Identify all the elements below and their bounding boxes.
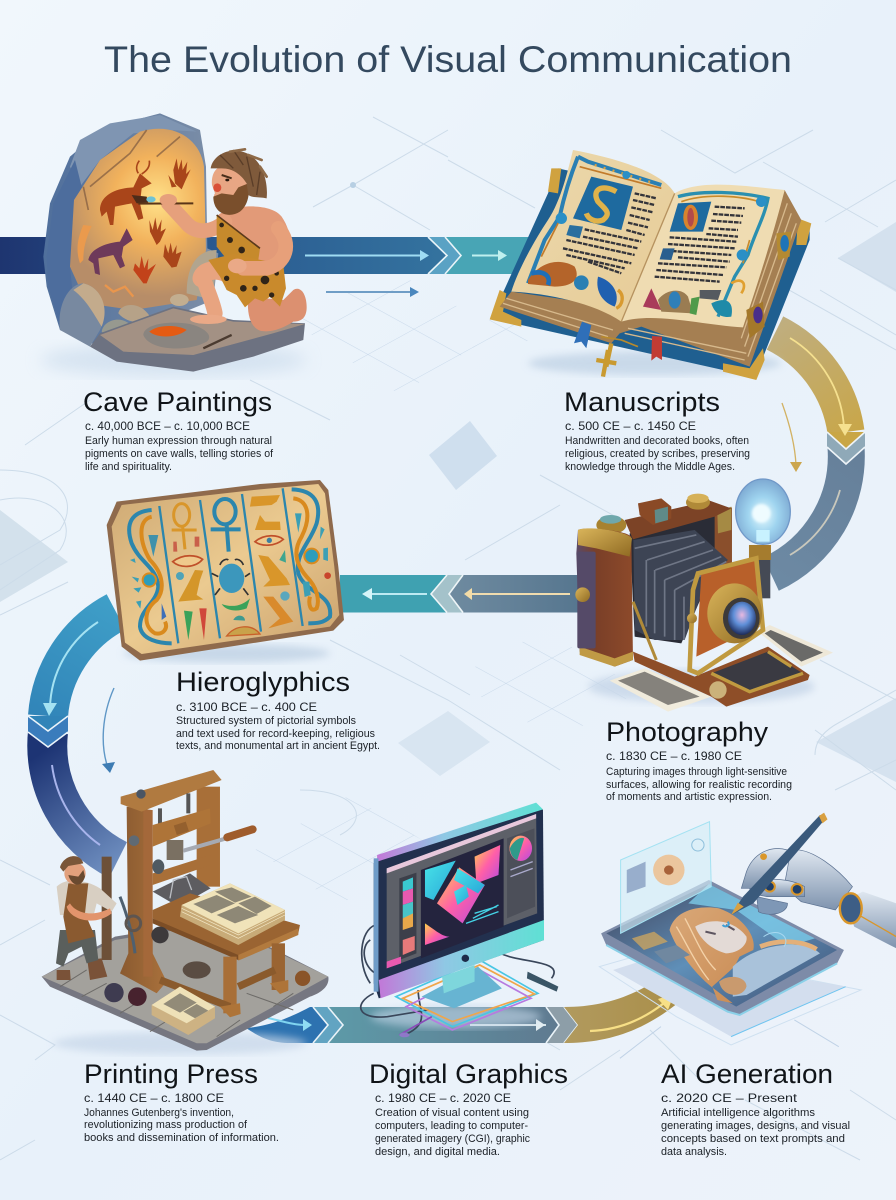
- label: hieroglyphics: Hieroglyphics: [176, 667, 350, 697]
- label: photography: surfaces, allowing for realistic recording: [606, 779, 792, 791]
- label: cave paintings: Early human expression through natural: [85, 435, 272, 447]
- ground slab: [90, 307, 305, 372]
- label: printing press: revolutionizing mass production of: [84, 1119, 247, 1131]
- arrow: small top connector: [326, 287, 419, 297]
- crossbar: [153, 855, 211, 885]
- right page: [621, 185, 785, 327]
- label: printing press: [84, 1059, 279, 1144]
- left page illumination: [528, 157, 661, 308]
- label: photography: Capturing images through light-sensitive: [606, 766, 787, 778]
- screen: [387, 814, 537, 968]
- shadow under rock: [40, 343, 307, 377]
- title: The Evolution of Visual Communication: [104, 39, 792, 80]
- stand: [422, 967, 502, 1008]
- ribbons and cross: [574, 322, 591, 348]
- eye: [173, 556, 203, 566]
- flash stand: [750, 545, 770, 598]
- label: hieroglyphics: texts, and monumental art in ancient Egypt.: [176, 740, 380, 752]
- label: digital graphics: Digital Graphics: [369, 1059, 568, 1089]
- label: printing press: Printing Press: [84, 1059, 258, 1089]
- label: hieroglyphics: Structured system of pictorial symbols: [176, 715, 356, 727]
- cover: [491, 168, 810, 378]
- label: digital graphics: design, and digital media.: [375, 1146, 500, 1158]
- printer figure: [56, 856, 117, 980]
- tunic top: [217, 215, 260, 263]
- falcon: [178, 570, 203, 602]
- left serpent border: [129, 510, 172, 643]
- illustration: vintage camera: [575, 479, 833, 712]
- label: AI generation: concepts based on text prompts and: [661, 1133, 845, 1145]
- arrow: hieroglyphics to printing press curve: [28, 612, 118, 860]
- front leg: [202, 271, 227, 278]
- illustration: illuminated manuscript: [490, 150, 811, 380]
- front arm: [243, 228, 286, 268]
- extended arm: [168, 203, 225, 231]
- table legs: [223, 957, 237, 1013]
- label: AI generation: Artificial intelligence algorithms: [661, 1107, 815, 1119]
- arrow: manuscripts to photography curve: [771, 333, 865, 574]
- right page illumination: [643, 192, 768, 317]
- boulders: [187, 250, 217, 300]
- label: digital graphics: Creation of visual content using: [375, 1107, 529, 1119]
- illustration: AI generation tablet and robot hand: [599, 813, 896, 1058]
- label: manuscripts: religious, created by scribes, preserving: [565, 448, 750, 460]
- label: AI generation: AI Generation: [661, 1059, 833, 1089]
- torso: [218, 206, 291, 268]
- portrait face: [695, 921, 747, 953]
- label: digital graphics: [369, 1059, 568, 1158]
- label: cave paintings: [83, 387, 273, 473]
- label: cave paintings: c. 40,000 BCE – c. 10,000 BCE: [85, 419, 250, 433]
- stone floor: [42, 920, 328, 1051]
- hair: [211, 151, 267, 198]
- label: printing press: Johannes Gutenberg's invention,: [84, 1107, 234, 1119]
- label: manuscripts: Manuscripts: [564, 387, 720, 417]
- illustration: cave paintings: [40, 113, 307, 377]
- usb: [399, 1017, 432, 1035]
- cables: [361, 925, 554, 1035]
- jewels: [776, 232, 791, 260]
- lit painted surface: [70, 129, 206, 310]
- page block: [500, 190, 801, 367]
- label: digital graphics: computers, leading to computer-: [375, 1120, 528, 1132]
- monitor frame: [374, 803, 544, 998]
- lens: [707, 583, 762, 643]
- ankh glyphs: [172, 504, 197, 549]
- strap: [217, 215, 260, 248]
- tablet widgets: [632, 932, 668, 950]
- label: digital graphics: generated imagery (CGI), graphic: [375, 1133, 531, 1145]
- right column glyphs: [250, 495, 280, 507]
- rear frame and top plate: [630, 508, 731, 643]
- camera body left: [576, 529, 633, 667]
- label: cave paintings: pigments on cave walls, telling stories of: [85, 448, 273, 460]
- table: [153, 893, 300, 960]
- label: AI generation: data analysis.: [661, 1146, 727, 1158]
- label: printing press: books and dissemination of information.: [84, 1132, 279, 1144]
- brush: [132, 195, 148, 203]
- label: printing press: c. 1440 CE – c. 1800 CE: [84, 1091, 224, 1105]
- base rings: [396, 960, 538, 1030]
- right serpent border: [292, 489, 330, 623]
- label: manuscripts: c. 500 CE – c. 1450 CE: [565, 419, 696, 433]
- label: AI generation: c. 2020 CE – Present: [661, 1091, 798, 1105]
- front standard: [696, 558, 760, 657]
- face: [212, 164, 248, 203]
- feathers: [184, 611, 193, 640]
- back leg and foot: [248, 289, 307, 331]
- portrait hair: [670, 907, 754, 1003]
- paper stack on press: [180, 883, 285, 945]
- label: hieroglyphics: c. 3100 BCE – c. 400 CE: [176, 700, 317, 714]
- stylus: [731, 815, 826, 915]
- label: cave paintings: Cave Paintings: [83, 387, 272, 417]
- label: AI generation: [661, 1059, 850, 1158]
- lower glyphs: [222, 598, 250, 610]
- illustration: digital graphics monitor: [361, 803, 558, 1037]
- caveman: [132, 149, 307, 331]
- holo base: [599, 950, 861, 1045]
- platen: [153, 873, 211, 907]
- label: cave paintings: life and spirituality.: [85, 461, 172, 473]
- label: photography: Photography: [606, 717, 769, 747]
- label: photography: [606, 717, 792, 803]
- beard: [213, 183, 249, 215]
- press rear post: [102, 857, 112, 960]
- robot arm: [846, 892, 896, 948]
- label: manuscripts: knowledge through the Middle Ages.: [565, 461, 735, 473]
- left page: [511, 150, 675, 322]
- tablet: [601, 880, 844, 1015]
- holographic panel: [621, 822, 711, 933]
- rock wall: [43, 113, 218, 347]
- screw and handle: [167, 840, 183, 860]
- label: hieroglyphics: and text used for record-keeping, religious: [176, 728, 375, 740]
- label: manuscripts: Handwritten and decorated books, often: [565, 435, 749, 447]
- label: manuscripts: [564, 387, 750, 473]
- label: AI generation: generating images, designs, and visual: [661, 1120, 850, 1132]
- label: hieroglyphics: [176, 667, 380, 752]
- bellows: [633, 530, 728, 640]
- label: photography: of moments and artistic expression.: [606, 791, 772, 803]
- skirt: [208, 254, 286, 307]
- scarab: [219, 564, 244, 593]
- illustration: printing press: [42, 770, 328, 1055]
- illustration: hieroglyphic tablet: [107, 480, 344, 663]
- press front post: [120, 807, 167, 993]
- gears: [120, 897, 135, 953]
- painted animals and hands: [88, 158, 191, 283]
- small paper stack: [152, 987, 215, 1035]
- column dividers: [159, 488, 303, 643]
- top beam: [121, 770, 222, 812]
- arrow: top band from cave paintings to manuscripts: [0, 237, 530, 274]
- ink balls: [104, 983, 124, 1002]
- paint bowl: [143, 323, 209, 348]
- baseboard: [633, 647, 810, 707]
- label: photography: c. 1830 CE – c. 1980 CE: [606, 749, 742, 763]
- portrait body: [733, 945, 820, 997]
- arrow: photography to hieroglyphics band: [340, 575, 581, 612]
- photographs: [610, 668, 711, 712]
- arrow: printing press to digital graphics band: [246, 978, 693, 1043]
- label: digital graphics: c. 1980 CE – c. 2020 CE: [375, 1091, 511, 1105]
